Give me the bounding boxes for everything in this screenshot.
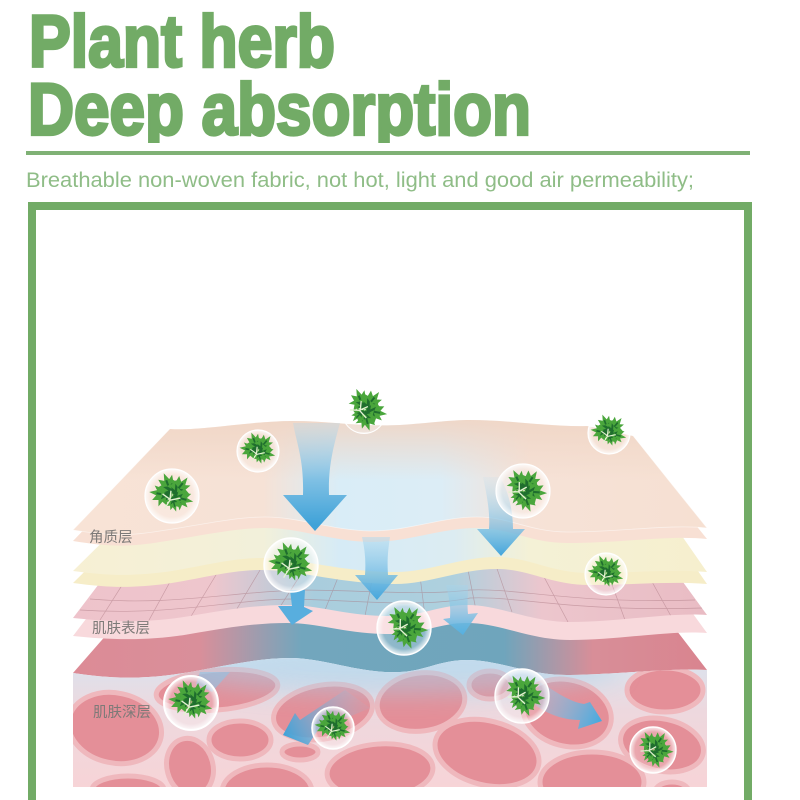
label: skin surface: 肌肤表层 <box>92 620 150 637</box>
divider line <box>26 151 750 155</box>
blue diffusion in deep layer <box>181 658 616 704</box>
herb bubble 8 <box>375 592 441 659</box>
title: Deep absorption <box>28 70 531 150</box>
title <box>30 12 528 143</box>
herb bubble 2 <box>237 429 279 472</box>
herb bubble 7 <box>585 552 627 595</box>
arrow: deep right <box>535 682 602 729</box>
herb bubble 6 <box>264 538 318 592</box>
green frame panel <box>28 202 752 800</box>
herb bubble 3 <box>337 376 399 440</box>
title: Plant herb <box>29 2 335 82</box>
layer: deep skin <box>73 623 707 787</box>
layer: cream <box>73 490 707 587</box>
herb bubble 11 <box>494 661 558 726</box>
skin layers diagram <box>62 376 708 800</box>
arrow: deep upper left <box>196 672 230 692</box>
herb bubble 4 <box>588 411 630 454</box>
herb bubble 9 <box>164 676 218 730</box>
layer: skin surface grid <box>73 569 707 640</box>
subtitle: Breathable non-woven fabric, not hot, light and good air permeability; <box>26 169 694 192</box>
arrow: lower right down <box>443 585 478 635</box>
arrow: lower left down <box>278 590 313 625</box>
arrow: middle down <box>355 537 398 600</box>
arrow: large down right <box>477 477 525 556</box>
herb bubble 10 <box>312 706 354 749</box>
layer: peach stratum corneum <box>73 420 707 546</box>
label: stratum corneum: 角质层 <box>89 529 132 546</box>
arrow: large down left <box>283 423 347 531</box>
arrow: deep left <box>283 690 370 745</box>
herb bubble 12 <box>628 719 684 776</box>
skin cells <box>73 667 706 787</box>
herb bubble 1 <box>145 469 199 523</box>
herb bubble 5 <box>494 455 560 522</box>
label: deep skin: 肌肤深层 <box>93 704 151 721</box>
